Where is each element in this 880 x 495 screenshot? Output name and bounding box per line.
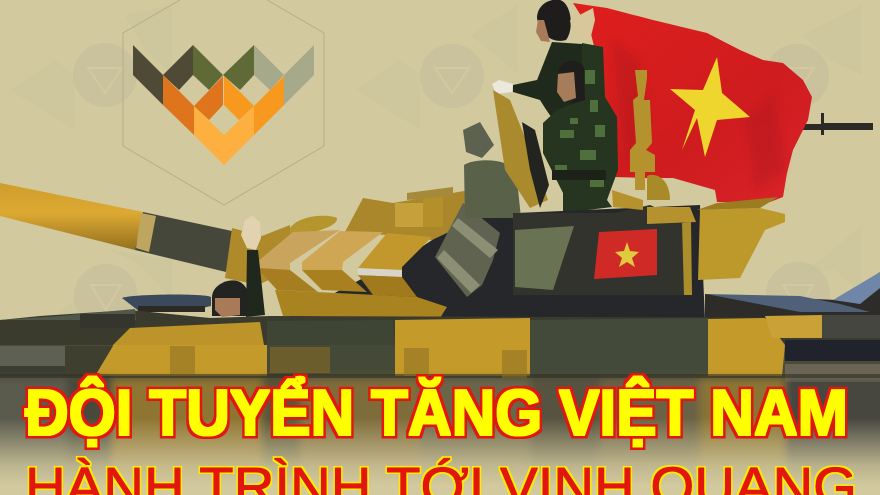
right deck of the tank <box>705 272 880 340</box>
front soldier <box>543 8 618 213</box>
flag star <box>670 57 750 157</box>
watermark pattern <box>10 5 862 330</box>
ERA blocks <box>257 230 340 270</box>
hull fittings <box>170 346 527 378</box>
turret <box>257 90 785 320</box>
flag pole mount <box>630 70 655 190</box>
flag <box>573 3 812 202</box>
rear soldier <box>492 0 592 130</box>
lower plate <box>0 378 880 495</box>
machine gun <box>803 113 873 135</box>
reactive armour blocks <box>435 203 500 297</box>
hatch <box>493 90 548 208</box>
bottom fade <box>0 418 880 486</box>
right turret block <box>513 205 692 295</box>
hand-waving driver <box>122 216 265 317</box>
gun barrel <box>0 183 337 285</box>
emblem star <box>615 242 639 267</box>
hull <box>0 309 880 495</box>
cupola <box>464 160 521 218</box>
turret flag emblem <box>594 229 657 279</box>
logo: hexagon with chevrons <box>123 0 324 205</box>
